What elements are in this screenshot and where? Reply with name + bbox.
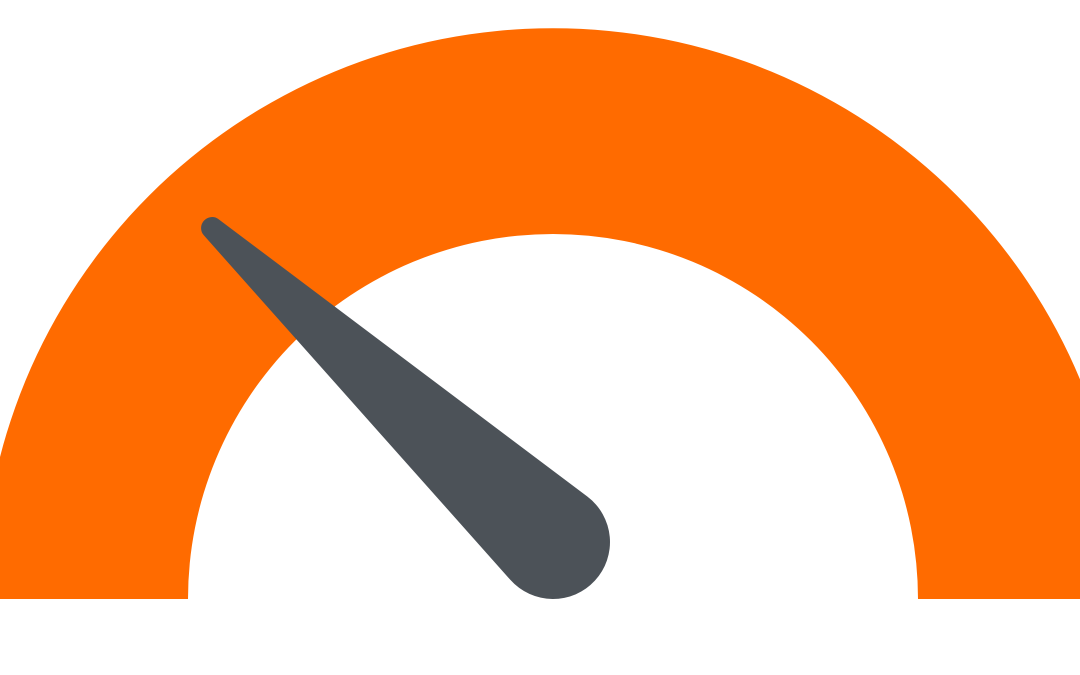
gauge needle (201, 217, 610, 599)
